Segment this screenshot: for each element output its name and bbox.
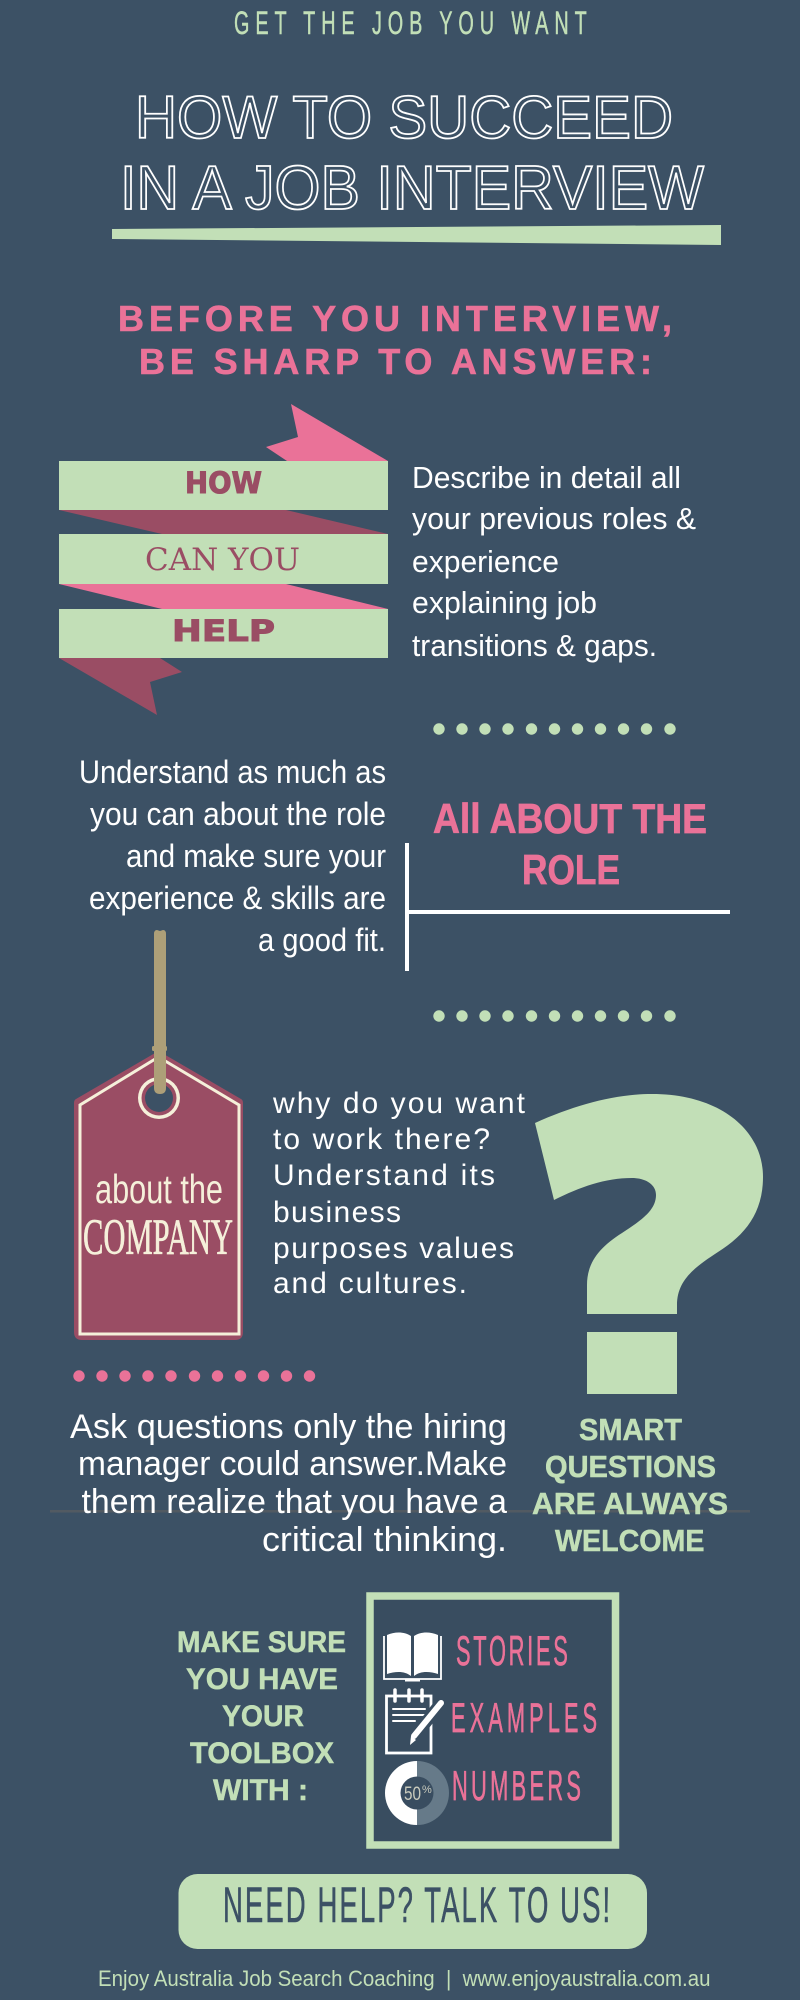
dotted separator 2 [433,1010,676,1022]
text block: previous roles [412,460,696,663]
text block: why this company [272,1087,526,1300]
icon: open book [384,1632,441,1682]
callout: smart questions: QUESTIONS [545,1449,716,1484]
text block: ask questions: manager could answer.Make [78,1445,507,1483]
callout: smart questions: WELCOME [555,1523,704,1558]
ribbon banner: how can you help: HOW [185,466,262,500]
dotted separator 1 [433,723,676,735]
icon: 50 percent donut: % [422,1784,432,1796]
footer: Enjoy Australia Job Search Coaching | www.enjoyaustralia.com.au [98,1966,710,1991]
text block: why this company: purposes values [273,1232,514,1265]
text block: why this company: Understand its [273,1159,495,1192]
text block: toolbox: WITH : [213,1774,308,1807]
title: HOW TO SUCCEED [135,84,673,151]
text block: about the role [79,754,386,958]
callout: smart questions: ARE ALWAYS [532,1486,728,1521]
text block: why this company: why do you want [272,1087,526,1120]
call to action button [178,1874,647,1949]
text block: why this company: to work there? [273,1123,490,1156]
title [120,84,704,223]
text block: about the role: you can about the role [90,796,386,832]
label: numbers: NUMBERS [452,1764,581,1810]
text block: about the role: and make sure your [126,838,386,874]
label: stories: STORIES [456,1629,568,1675]
heading: all about the role: All ABOUT THE [433,795,707,842]
text block: ask questions [70,1408,507,1559]
title underline [112,225,721,245]
section heading: before you interview: BEFORE YOU INTERVIEW, [118,298,672,339]
icon: large question mark [535,1094,763,1394]
tagline: GET THE JOB YOU WANT [234,5,587,41]
text block: previous roles: transitions & gaps. [412,628,657,663]
panel: toolbox frame [370,1596,616,1845]
text block: toolbox [177,1626,346,1807]
section heading: before you interview [118,298,672,382]
call to action button: NEED HELP? TALK TO US! [223,1876,610,1933]
text block: previous roles: experience [412,544,559,579]
text block: why this company: and cultures. [273,1267,467,1300]
price tag: about the company: about the [95,1166,223,1212]
text block: previous roles: your previous roles & [412,501,696,536]
text block: previous roles: explaining job [412,585,597,620]
price tag: about the company: COMPANY [83,1210,233,1266]
ribbon banner: how can you help: CAN YOU [145,542,300,578]
callout: smart questions [532,1412,728,1558]
label: examples: EXAMPLES [451,1696,597,1742]
text block: why this company: business [273,1196,401,1229]
text block: ask questions: them realize that you have a [82,1483,507,1521]
text block: about the role: Understand as much as [79,754,386,790]
text block: about the role: a good fit. [258,922,386,958]
heading: all about the role [433,795,707,893]
text block: toolbox: YOU HAVE [186,1663,338,1696]
icon: 50 percent donut [385,1761,449,1825]
callout: smart questions: SMART [579,1412,682,1447]
ribbon banner: how can you help [59,404,388,715]
text block: ask questions: critical thinking. [262,1521,507,1559]
dotted separator 3 [73,1370,315,1382]
text block: toolbox: MAKE SURE [177,1626,346,1659]
icon: notepad and pencil [386,1690,441,1753]
heading: all about the role: ROLE [522,846,620,893]
icon: 50 percent donut: 50 [404,1784,421,1805]
text block: toolbox: YOUR [222,1700,304,1733]
title: IN A JOB INTERVIEW [120,154,704,223]
role heading bracket lines [405,843,730,971]
text block: toolbox: TOOLBOX [190,1737,334,1770]
section heading: before you interview: BE SHARP TO ANSWER: [139,341,652,382]
price tag: about the company [74,930,243,1340]
text block: about the role: experience & skills are [89,880,386,916]
text block: previous roles: Describe in detail all [412,460,681,495]
ribbon banner: how can you help: HELP [172,614,275,648]
text block: ask questions: Ask questions only the hiring [70,1408,507,1446]
